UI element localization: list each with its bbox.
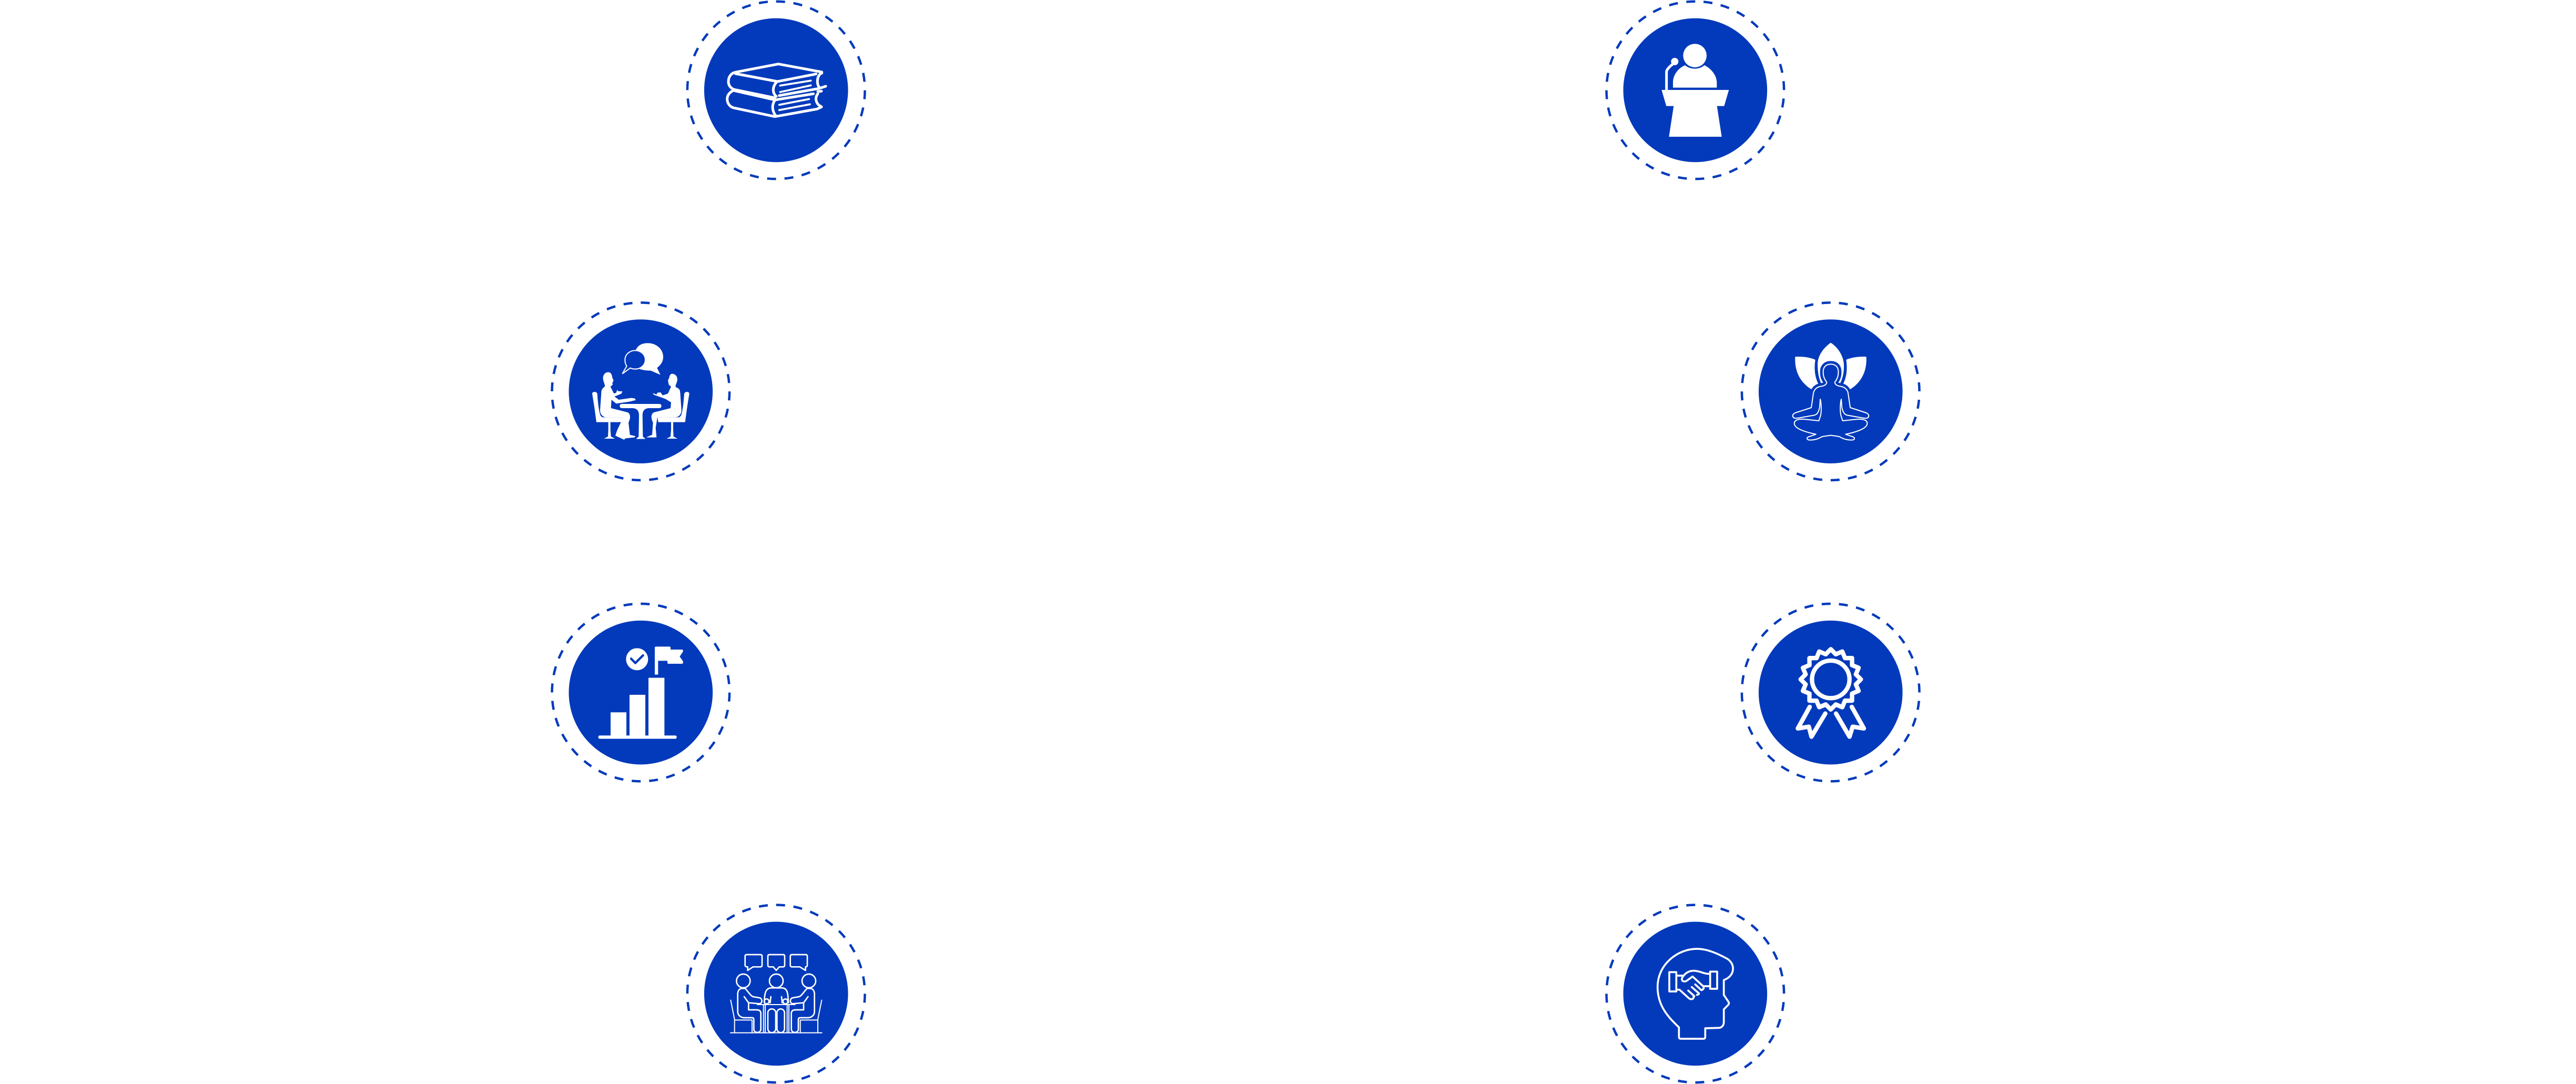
blue disc (1623, 18, 1767, 162)
icon: speaker at podium (1661, 44, 1729, 137)
blue disc (1759, 621, 1903, 764)
blue disc (1623, 921, 1767, 1066)
dashed ring (687, 905, 865, 1082)
blue disc (569, 621, 713, 764)
icon: three people talking around a table (731, 955, 822, 1033)
dashed ring (552, 604, 729, 782)
panel: speaker at podium badge (1606, 2, 1784, 179)
icon: rising bars with flag and check mark (599, 646, 683, 739)
blue disc (569, 319, 713, 463)
dashed ring (1742, 302, 1920, 480)
panel: award rosette badge (1742, 604, 1920, 782)
icon: award rosette with ribbons (1798, 649, 1864, 737)
panel: goal chart badge (552, 604, 729, 782)
blue disc (704, 921, 848, 1066)
blue disc (1759, 319, 1903, 463)
panel: two people talking badge (552, 302, 729, 480)
panel: head with handshake badge (1606, 905, 1784, 1082)
icon: meditating figure with lotus (1793, 343, 1869, 440)
panel: group meeting badge (687, 905, 865, 1082)
dashed ring (1606, 905, 1784, 1082)
dashed ring (687, 2, 865, 179)
icon: two people talking at a table (592, 343, 689, 440)
panel: meditation badge (1742, 302, 1920, 480)
dashed ring (1606, 2, 1784, 179)
icon: head profile containing handshake (1658, 949, 1733, 1039)
icon: stacked books (727, 64, 826, 117)
dashed ring (552, 302, 729, 480)
blue disc (704, 18, 848, 162)
dashed ring (1742, 604, 1920, 782)
panel: books badge (687, 2, 865, 179)
